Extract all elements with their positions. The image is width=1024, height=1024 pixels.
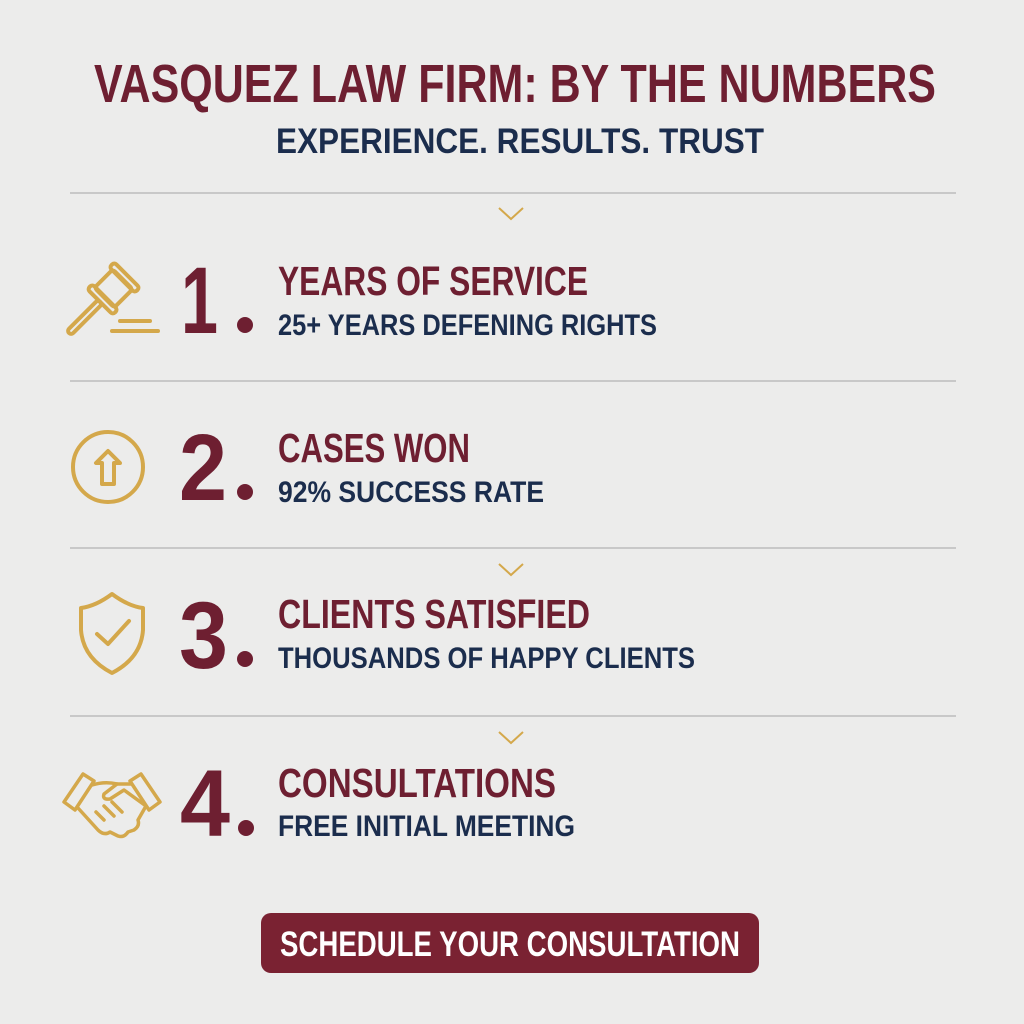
subtitle: EXPERIENCE. RESULTS. TRUST <box>276 122 764 161</box>
number 2: 2 <box>179 415 227 521</box>
row 1: years of service <box>56 248 657 354</box>
number 4: 4 <box>180 751 230 857</box>
subtext: 25+ YEARS DEFENING RIGHTS <box>278 309 657 342</box>
icon: circle up arrow <box>73 432 143 502</box>
number 3: 3 <box>179 583 228 689</box>
heading: CASES WON <box>278 425 470 471</box>
subtext: 92% SUCCESS RATE <box>278 476 544 509</box>
button: schedule consultation: SCHEDULE YOUR CONSULTATION <box>280 925 740 964</box>
chevron 1 <box>499 208 523 219</box>
chevron 2 <box>499 564 523 575</box>
icon: handshake <box>64 774 160 836</box>
icon: gavel <box>56 262 158 346</box>
heading: CONSULTATIONS <box>278 760 556 806</box>
row 2: cases won <box>73 415 544 521</box>
subtext: FREE INITIAL MEETING <box>278 810 575 843</box>
subtext: THOUSANDS OF HAPPY CLIENTS <box>278 642 695 675</box>
row 3: clients satisfied <box>81 583 695 689</box>
row 4: consultations <box>64 751 575 857</box>
heading: CLIENTS SATISFIED <box>278 591 590 637</box>
chevron 3 <box>499 732 523 743</box>
button: schedule consultation <box>261 913 759 973</box>
heading: YEARS OF SERVICE <box>278 258 588 304</box>
number 1: 1 <box>181 248 218 354</box>
icon: shield check <box>81 594 143 673</box>
